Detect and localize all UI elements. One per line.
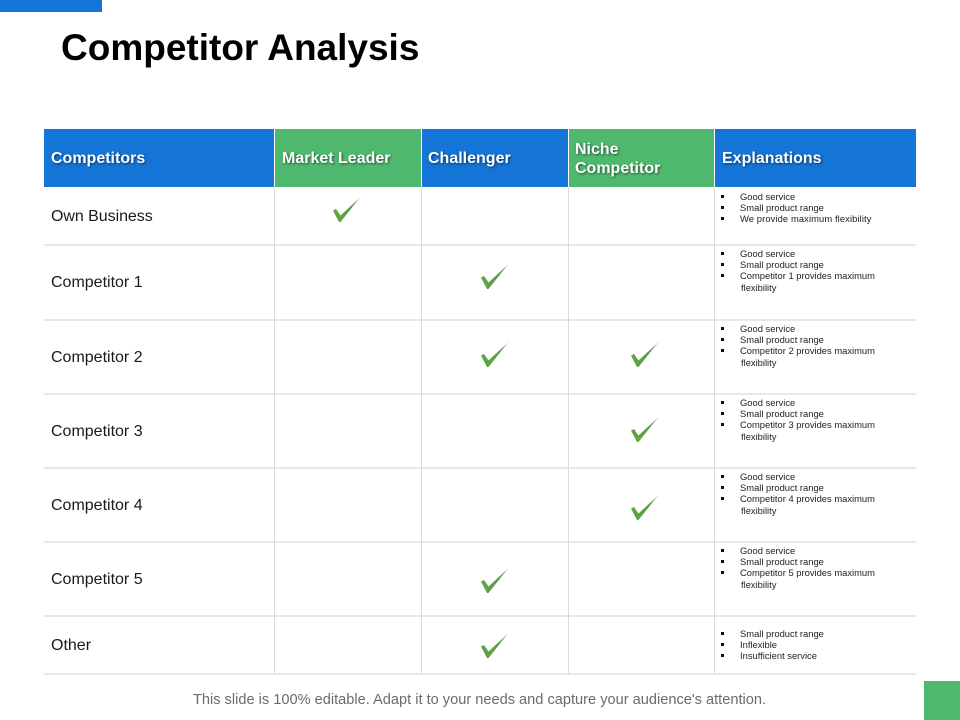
icon: check, Own Business, Market Leader <box>333 197 360 222</box>
header: Market Leader: Market Leader <box>282 150 390 166</box>
icon: check, Competitor 3, Niche <box>631 417 658 442</box>
explanation: Competitor 4: Competitor 4 provides maximum <box>740 493 875 504</box>
explanation: Own Business: We provide maximum flexibility <box>740 213 872 224</box>
explanation: Competitor 1: Small product range <box>740 259 824 270</box>
row label: Own Business: Own Business <box>51 208 153 225</box>
explanation: Competitor 5: Competitor 5 provides maximum <box>740 567 875 578</box>
explanation: Competitor 5: Small product range <box>740 556 824 567</box>
explanation: Competitor 3 <box>721 397 875 442</box>
header: Explanations: Explanations <box>722 150 822 166</box>
icon: check, Competitor 2, Challenger <box>481 342 508 367</box>
explanation: Other: Inflexible <box>740 639 777 650</box>
row label: Competitor 3: Competitor 3 <box>51 423 143 440</box>
explanation: Competitor 4 <box>721 471 875 516</box>
top accent bar <box>0 0 102 12</box>
explanation: Competitor 3: Small product range <box>740 408 824 419</box>
explanation: Other: Insufficient service <box>740 650 817 661</box>
explanation: Competitor 5: Good service <box>740 545 795 556</box>
explanation: Competitor 1: flexibility <box>741 282 776 292</box>
explanation: Competitor 1: Competitor 1 provides maximum <box>740 270 875 281</box>
title: Competitor Analysis <box>61 27 419 68</box>
explanation: Competitor 1 <box>721 248 875 293</box>
row label: Competitor 4: Competitor 4 <box>51 497 143 514</box>
explanation: Competitor 5 <box>721 545 875 590</box>
explanation: Competitor 2: Good service <box>740 323 795 334</box>
row label: Other: Other <box>51 637 91 654</box>
explanation: Competitor 3: Competitor 3 provides maximum <box>740 419 875 430</box>
bottom-right green square <box>924 681 960 720</box>
header: Challenger: Challenger <box>428 150 511 166</box>
icon: check, Competitor 4, Niche <box>631 495 658 520</box>
explanation: Competitor 3: Good service <box>740 397 795 408</box>
header: Niche Competitor <box>569 129 714 187</box>
header: Competitors: Competitors <box>51 150 145 166</box>
header: Competitors <box>44 129 274 187</box>
explanation: Competitor 5: flexibility <box>741 578 776 590</box>
footer note: This slide is 100% editable. Adapt it to your needs and capture your audience's attention. <box>193 692 766 708</box>
row label: Competitor 2: Competitor 2 <box>51 349 143 366</box>
header: Explanations <box>715 129 916 187</box>
explanation: Other <box>721 628 824 661</box>
explanation: Own Business <box>721 191 872 224</box>
explanation: Competitor 1: Good service <box>740 248 795 259</box>
explanation: Competitor 2: Competitor 2 provides maximum <box>740 345 875 356</box>
icon: check, Competitor 5, Challenger <box>481 568 508 593</box>
header: Market Leader <box>275 129 421 187</box>
explanation: Competitor 2: Small product range <box>740 334 824 345</box>
row label: Competitor 5: Competitor 5 <box>51 571 143 588</box>
explanation: Competitor 3: flexibility <box>741 430 776 442</box>
row label: Competitor 1: Competitor 1 <box>51 274 143 291</box>
icon: check, Competitor 2, Niche <box>631 342 658 367</box>
header: Niche Competitor: Competitor <box>575 160 660 177</box>
icon: check, Competitor 1, Challenger <box>481 264 508 289</box>
explanation: Competitor 2 <box>721 323 875 368</box>
explanation: Other: Small product range <box>740 628 824 639</box>
explanation: Competitor 4: Good service <box>740 471 795 482</box>
icon: check, Other, Challenger <box>481 633 508 658</box>
explanation: Competitor 4: Small product range <box>740 482 824 493</box>
header: Challenger <box>422 129 568 187</box>
explanation: Competitor 2: flexibility <box>741 356 776 368</box>
explanation: Own Business: Good service <box>740 191 795 202</box>
explanation: Own Business: Small product range <box>740 202 824 213</box>
header: Niche Competitor: Niche <box>575 141 619 158</box>
explanation: Competitor 4: flexibility <box>741 504 776 516</box>
